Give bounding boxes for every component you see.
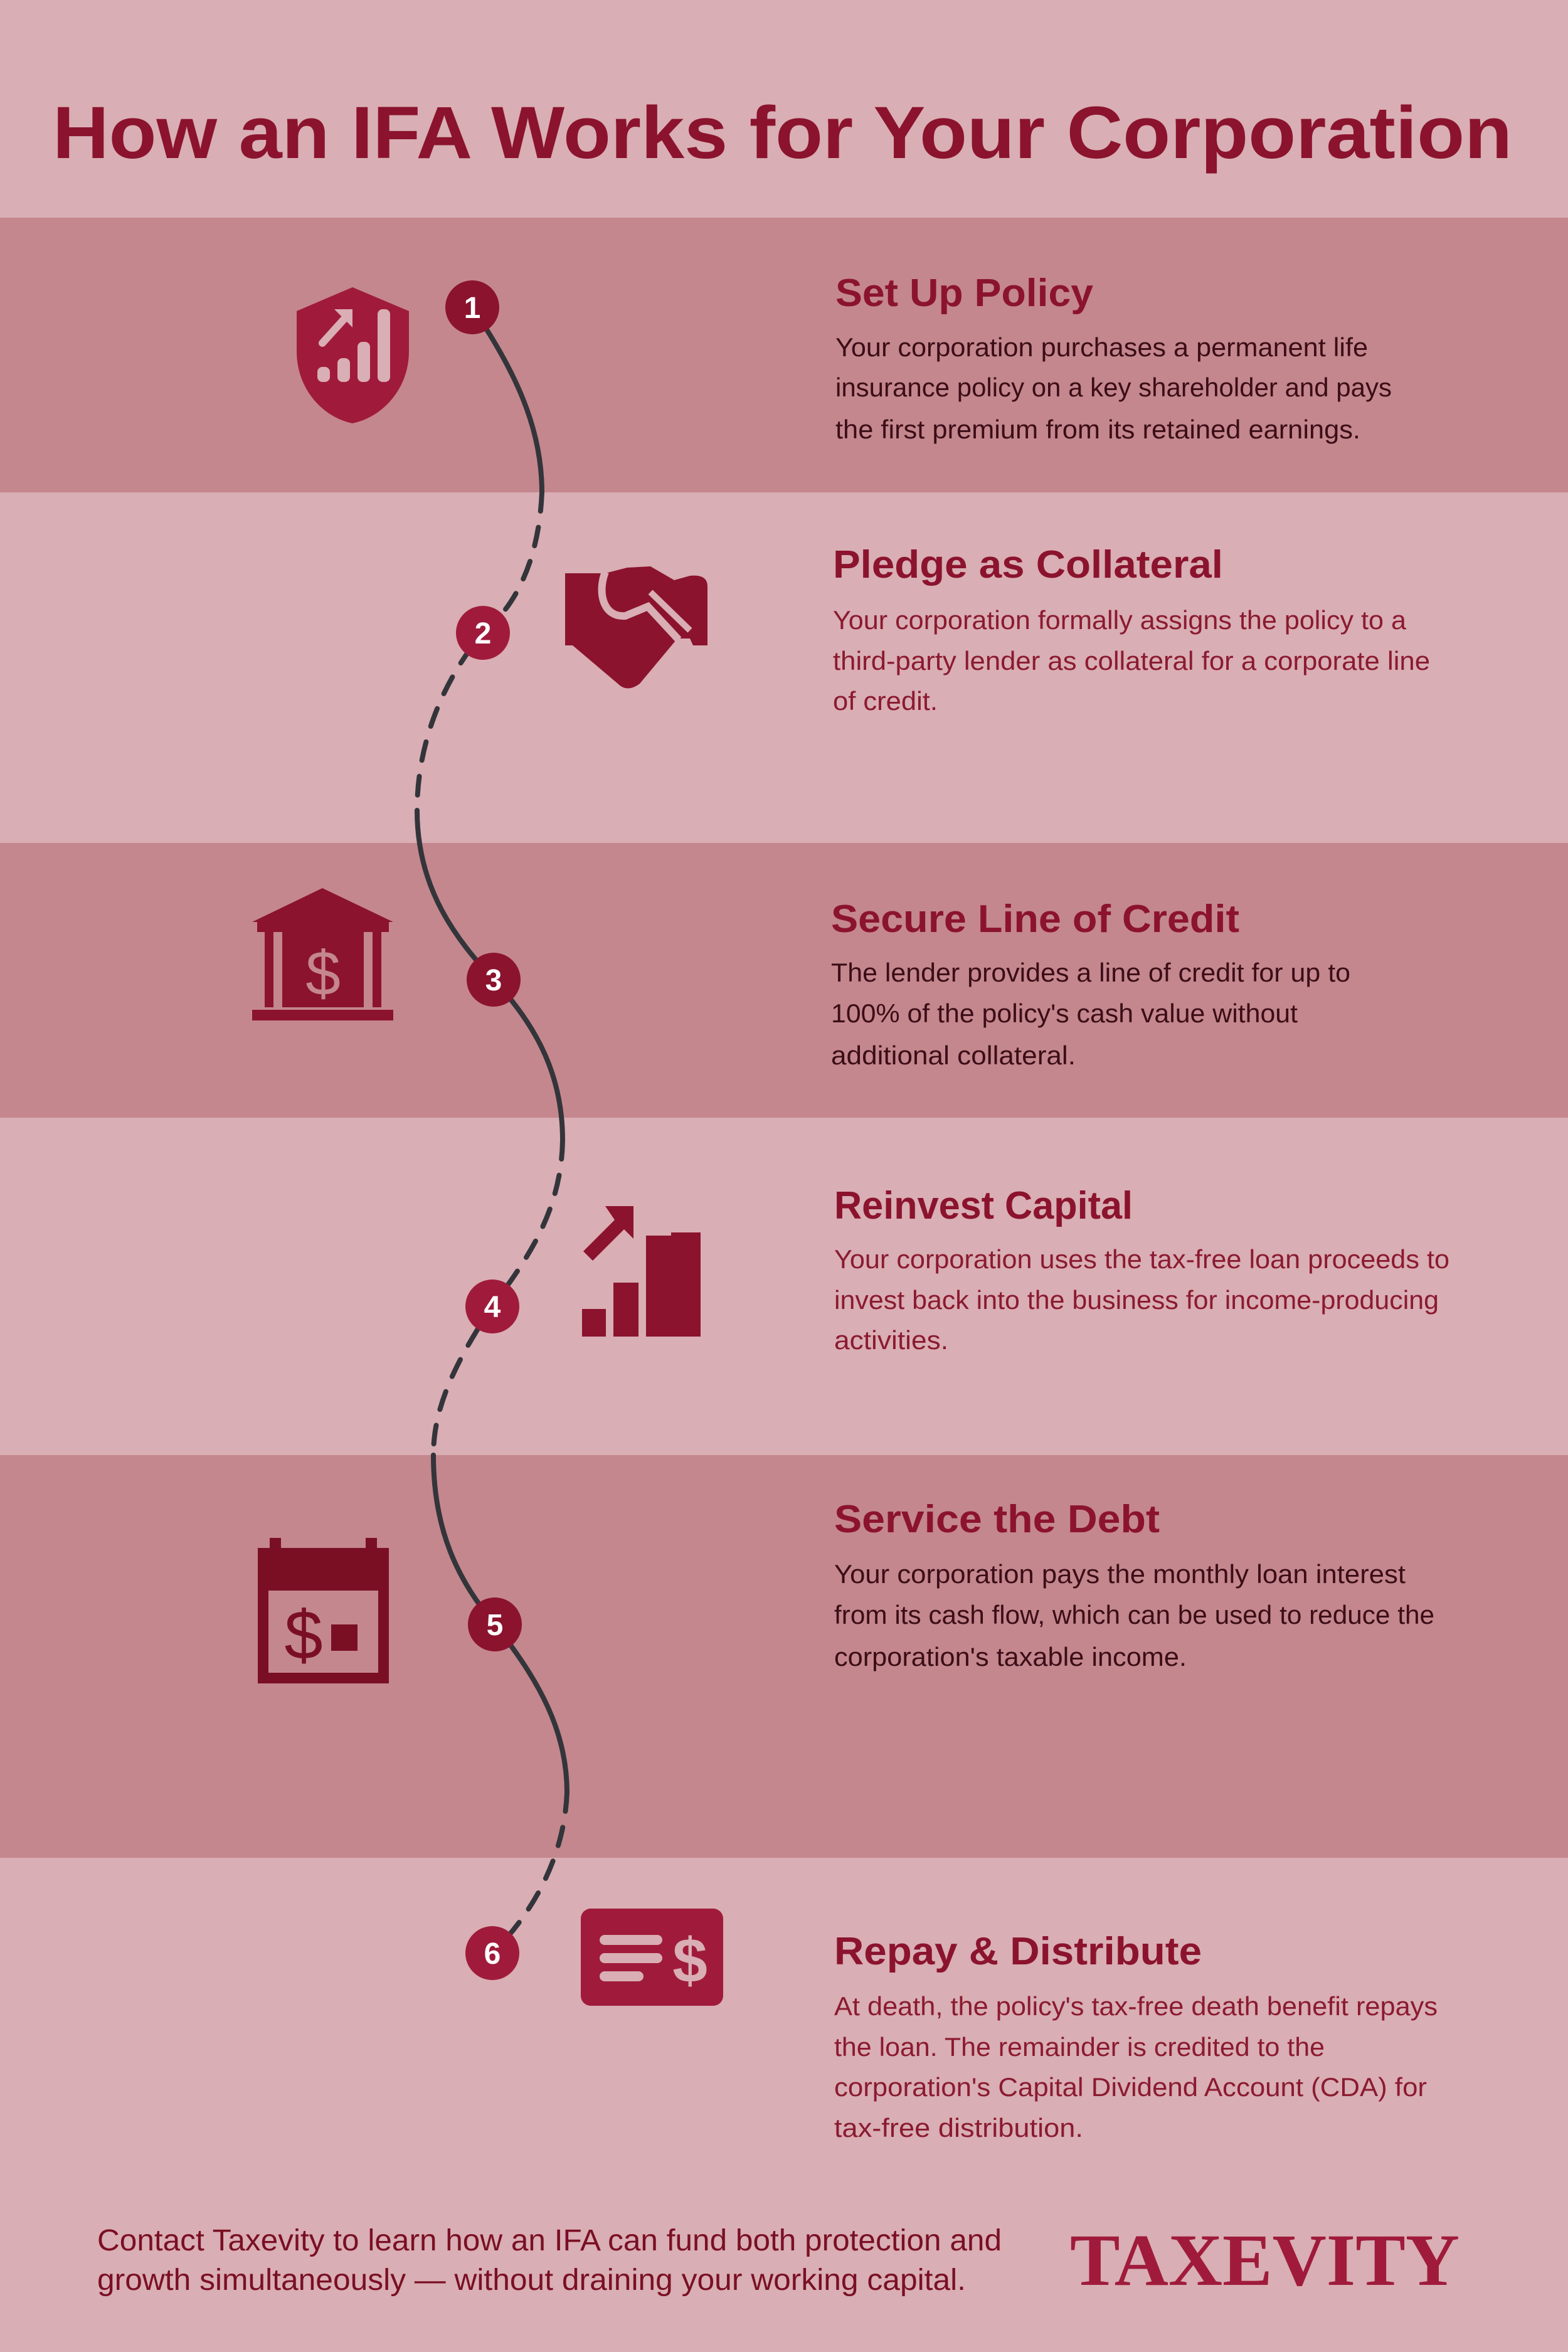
step 1 text <box>835 272 1392 444</box>
step numbers: 6 <box>484 1937 501 1971</box>
icon: handshake <box>565 566 707 689</box>
title: How an IFA Works for Your Corporation <box>53 92 1512 174</box>
footer call to action <box>97 2224 1002 2297</box>
step 6 text: Repay & Distribute <box>834 1930 1202 1973</box>
step numbers <box>445 280 522 1980</box>
step 1 text: Set Up Policy <box>835 272 1094 315</box>
step 3 text: Secure Line of Credit <box>831 898 1239 941</box>
step 4 text: Your corporation uses the tax-free loan proceeds to <box>834 1244 1449 1274</box>
step 5 text: corporation's taxable income. <box>834 1642 1187 1671</box>
timeline path <box>417 307 567 1953</box>
step numbers: 3 <box>485 964 502 997</box>
step 6 text: At death, the policy's tax-free death benefit repays <box>834 1991 1438 2021</box>
step 5 text: from its cash flow, which can be used to reduce the <box>834 1600 1434 1629</box>
step 1 text: the first premium from its retained earnings. <box>835 415 1360 444</box>
step 2 text: Your corporation formally assigns the policy to a <box>833 605 1407 635</box>
icon: bank <box>252 888 393 1020</box>
step 3 text <box>831 898 1350 1070</box>
icon: shield chart <box>297 287 409 423</box>
step 6 text: corporation's Capital Dividend Account (CDA) for <box>834 2072 1427 2102</box>
step 3 text: 100% of the policy's cash value without <box>831 999 1298 1028</box>
step numbers: 2 <box>475 617 491 650</box>
step 4 text: invest back into the business for income-producing <box>834 1285 1439 1315</box>
step numbers: 5 <box>487 1609 503 1642</box>
step 2 text: third-party lender as collateral for a corporate line <box>833 646 1430 675</box>
icon: check/card <box>581 1909 723 2006</box>
step 2 text: of credit. <box>833 686 938 716</box>
icon: calendar: $ <box>284 1597 323 1674</box>
step 6 text <box>834 1930 1438 2143</box>
step 3 text: additional collateral. <box>831 1041 1076 1070</box>
step numbers: 1 <box>464 292 480 325</box>
icon: bank: $ <box>305 938 341 1009</box>
icon: growth chart <box>582 1206 701 1337</box>
logo: TAXEVITY <box>1070 2219 1459 2301</box>
footer call to action: growth simultaneously — without draining your working capital. <box>97 2264 966 2297</box>
step 6 text: the loan. The remainder is credited to the <box>834 2032 1325 2062</box>
step 1 text: Your corporation purchases a permanent life <box>835 332 1368 362</box>
step 5 text: Service the Debt <box>834 1498 1160 1541</box>
footer call to action: Contact Taxevity to learn how an IFA can fund both protection and <box>97 2224 1002 2257</box>
step 2 text <box>833 543 1430 716</box>
step 5 text <box>834 1498 1434 1671</box>
step 1 text: insurance policy on a key shareholder and pays <box>835 373 1392 402</box>
step 4 text: Reinvest Capital <box>834 1184 1133 1227</box>
step 5 text: Your corporation pays the monthly loan interest <box>834 1559 1406 1589</box>
step 3 text: The lender provides a line of credit for up to <box>831 958 1350 987</box>
step 6 text: tax-free distribution. <box>834 2113 1083 2143</box>
step 4 text: activities. <box>834 1325 948 1355</box>
step 4 text <box>834 1184 1449 1355</box>
step 2 text: Pledge as Collateral <box>833 543 1223 586</box>
icon: check/card: $ <box>672 1926 707 1996</box>
icon: calendar <box>258 1538 389 1683</box>
step numbers: 4 <box>484 1291 501 1324</box>
